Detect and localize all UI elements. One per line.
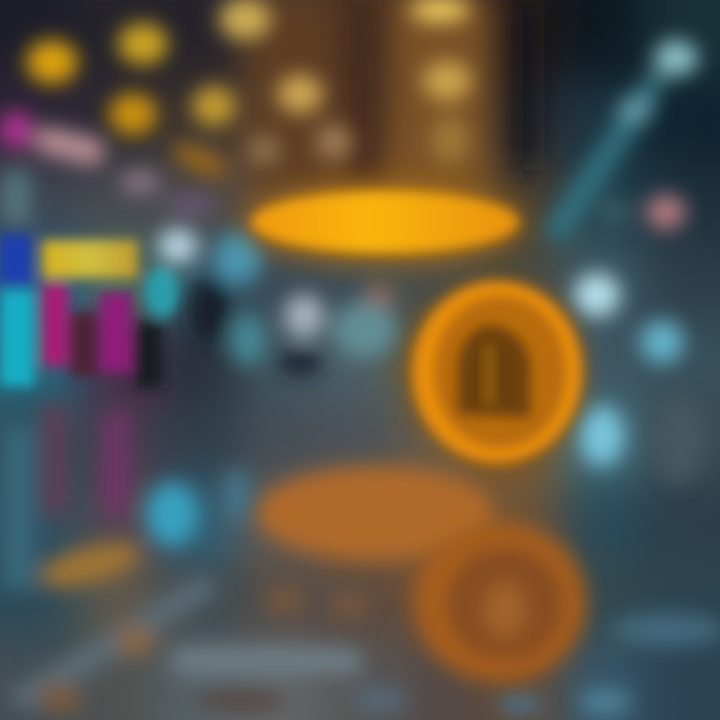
brown building columns bbox=[250, 0, 535, 185]
reflected coin bbox=[414, 522, 586, 682]
ceiling lights bbox=[26, 0, 471, 184]
orange coin bbox=[407, 277, 587, 469]
yellow glowing disc bbox=[245, 184, 525, 264]
left colour blocks bbox=[0, 234, 180, 388]
reflected orange disc bbox=[257, 467, 493, 559]
mid-street glows bbox=[2, 228, 397, 596]
neon sign band bbox=[0, 111, 214, 225]
bottom street streaks bbox=[5, 575, 542, 716]
right side streak and lights bbox=[540, 40, 720, 716]
